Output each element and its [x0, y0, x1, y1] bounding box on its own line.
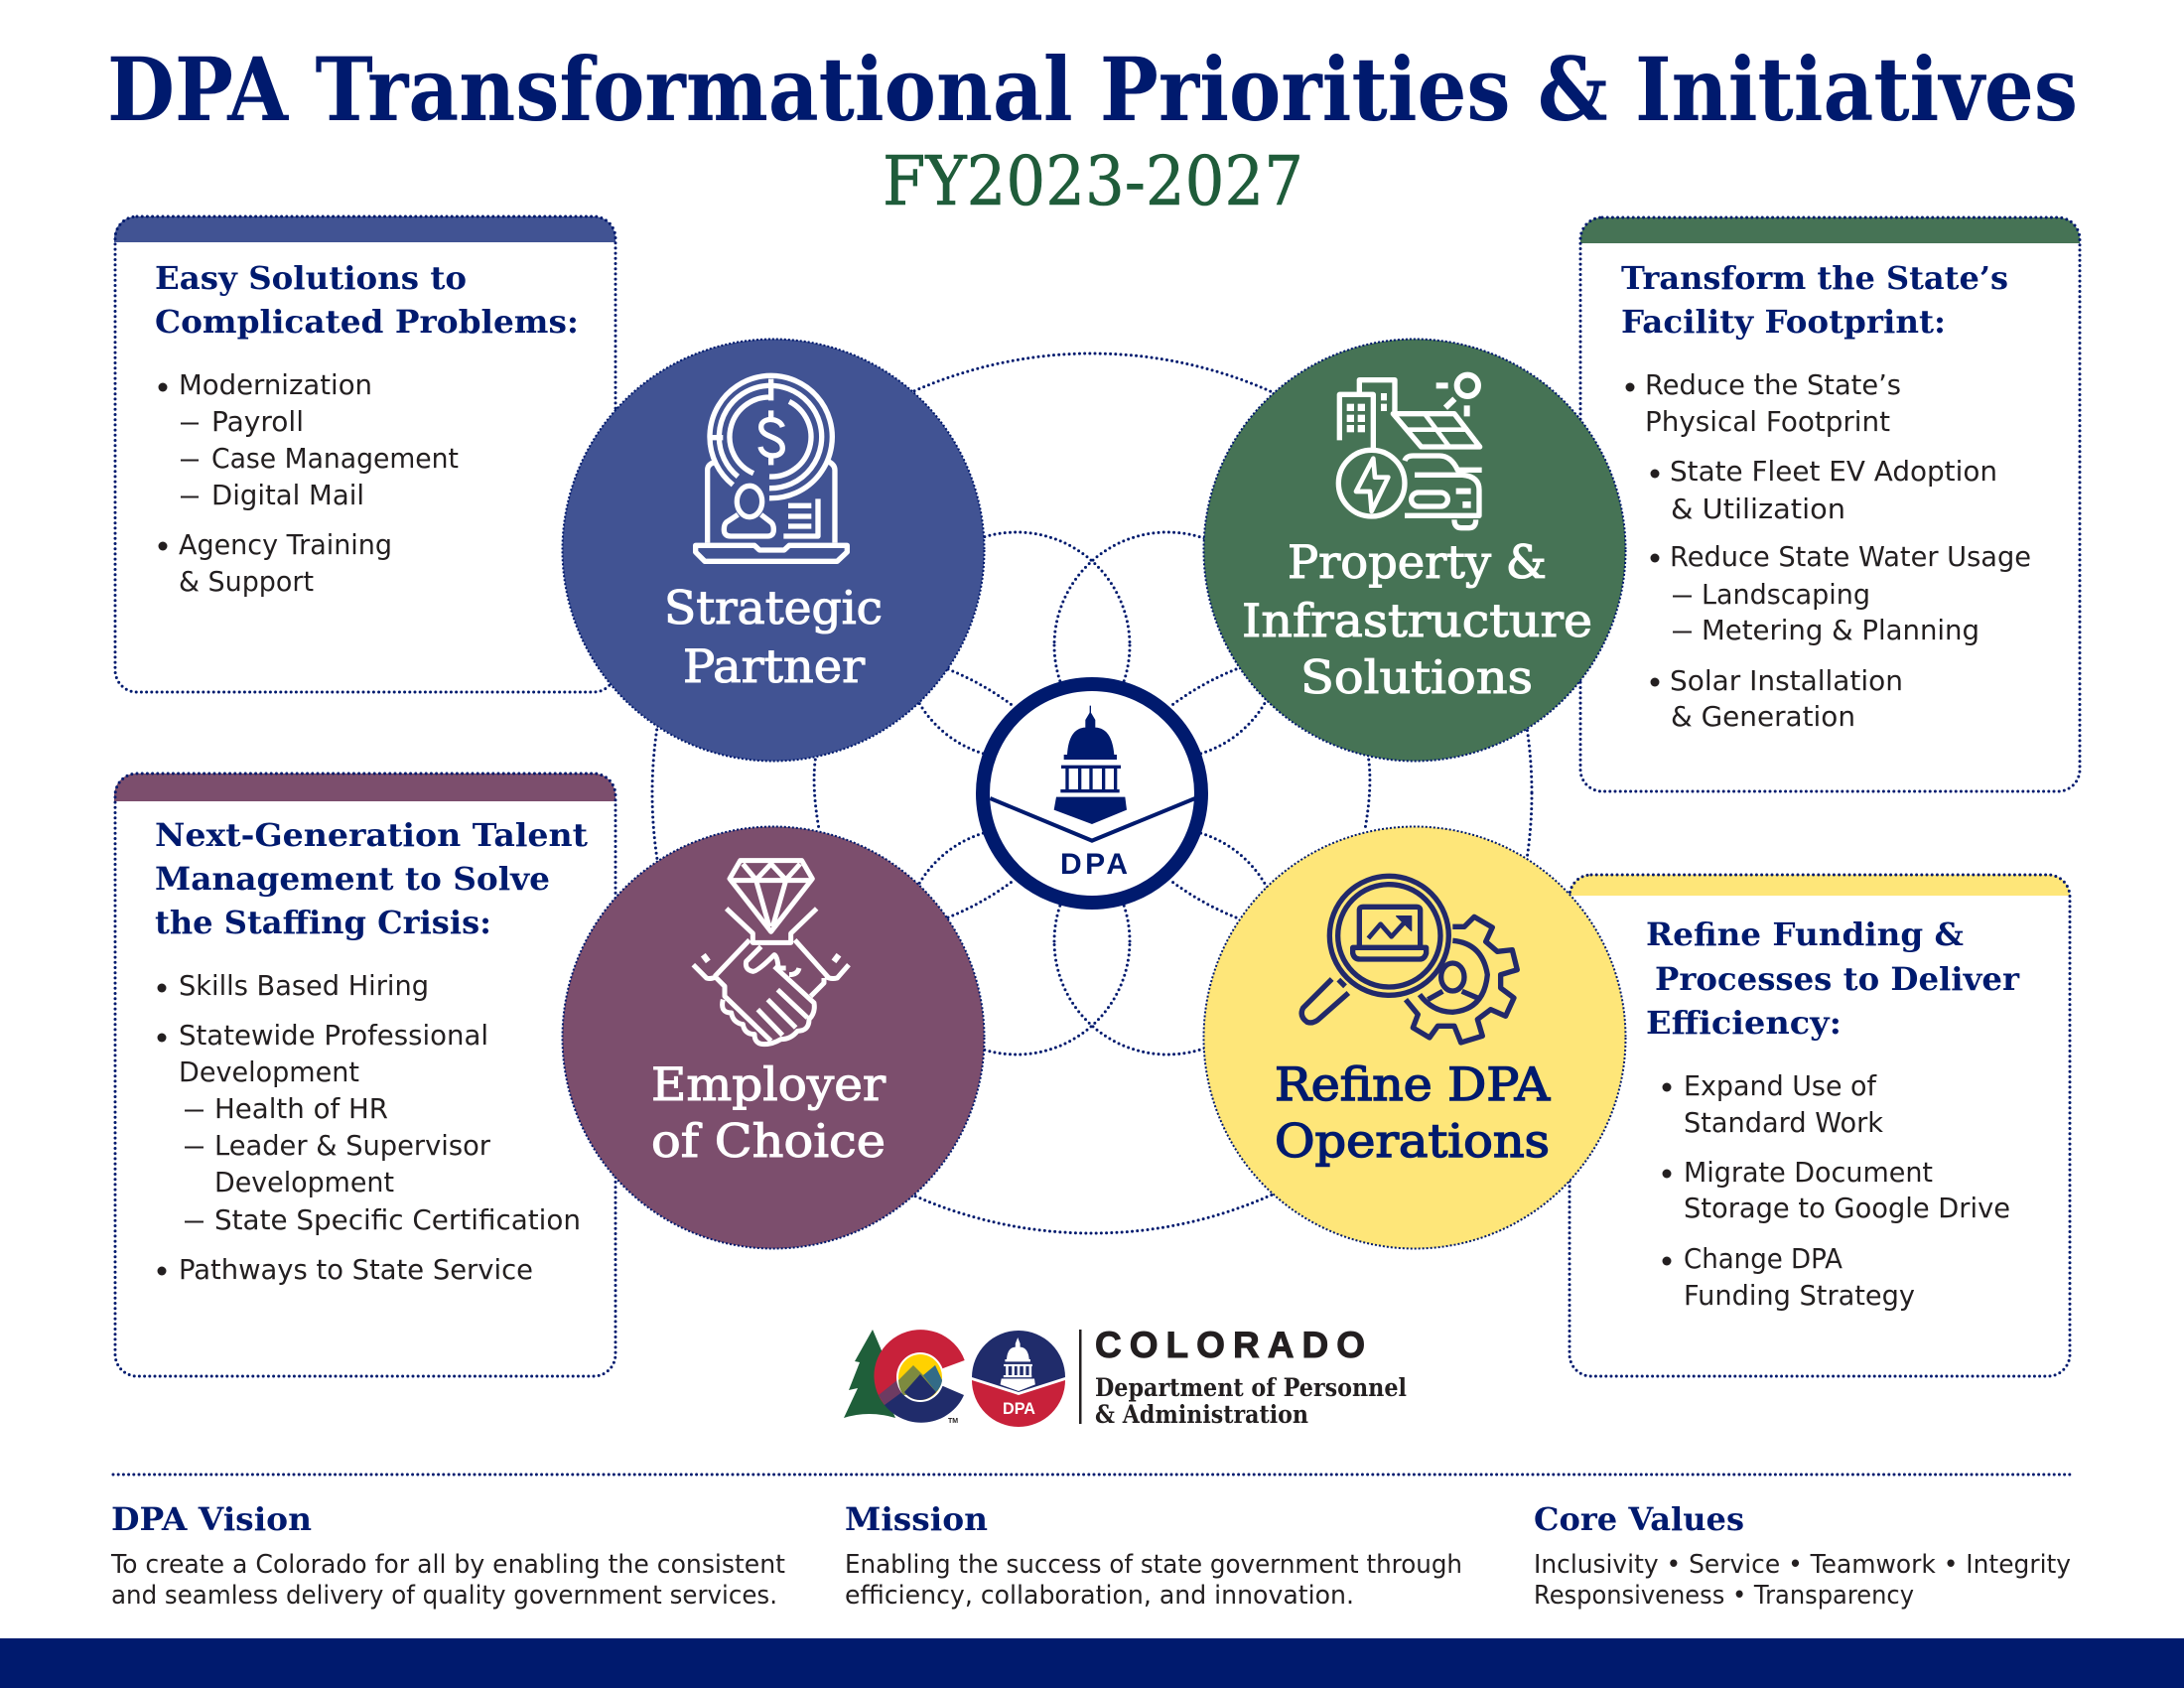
label: property and infrastructure solutions: Solutions: [1300, 650, 1533, 704]
logo text: & Administration: [1095, 1400, 1308, 1429]
bullet list: easy solutions: Agency Training: [179, 528, 392, 561]
panel band: green: [1580, 217, 2080, 243]
panel border: [115, 774, 615, 1376]
bullet list: easy solutions: Payroll: [211, 405, 304, 438]
bullet list: facility: —: [1672, 614, 1693, 646]
heading: facility footprint: [1621, 259, 2008, 341]
bottom bar: [0, 1638, 2184, 1688]
panel border: [1570, 875, 2070, 1376]
bullet list: refine funding: Funding Strategy: [1684, 1279, 1915, 1312]
icon: capitol building: [990, 706, 1195, 841]
icon: magnifier with laptop and gear: [1301, 876, 1517, 1043]
bullet list: refine funding: Change DPA: [1684, 1242, 1843, 1275]
bullet list: facility: Reduce the State’s: [1645, 368, 1901, 401]
panel: easy solutions: [114, 216, 615, 692]
footer: core values: Inclusivity • Service • Teamwork • Integrity: [1534, 1550, 2071, 1580]
icon: DPA emblem: [972, 1331, 1065, 1427]
bullet list: easy solutions: —: [180, 442, 200, 475]
bullet list: easy solutions: [159, 368, 459, 598]
footer: mission: efficiency, collaboration, and innovation.: [845, 1581, 1354, 1611]
bullet list: talent: —: [184, 1092, 205, 1125]
footer: core values: [1534, 1500, 2071, 1611]
icon: Colorado C: TM: [948, 1418, 958, 1425]
dotted flower pattern behind circles: [652, 353, 1532, 1233]
heading: easy solutions: [155, 259, 579, 341]
bullet list: facility: Reduce State Water Usage: [1670, 540, 2031, 573]
circle: refine DPA operations: [1203, 826, 1626, 1249]
bullet list: talent: Statewide Professional: [179, 1019, 488, 1052]
icon: DPA emblem: DPA: [1003, 1399, 1035, 1418]
bullet list: talent: —: [184, 1129, 205, 1162]
bullet list: easy solutions: Case Management: [211, 442, 459, 475]
bullet list: easy solutions: Modernization: [179, 368, 372, 401]
logo text: Department of Personnel: [1095, 1373, 1407, 1402]
label: property and infrastructure solutions: Property &: [1288, 535, 1547, 589]
footer: mission: Mission: [845, 1500, 988, 1538]
bullet list: facility: & Generation: [1671, 700, 1855, 733]
bullet list: talent: Skills Based Hiring: [179, 969, 429, 1002]
footer: DPA vision: DPA Vision: [111, 1500, 312, 1538]
bullet list: talent: Development: [179, 1055, 359, 1088]
panel: facility footprint: [1580, 217, 2080, 791]
bullet list: facility: —: [1672, 578, 1693, 611]
heading: easy solutions: Easy Solutions to: [155, 259, 467, 297]
label: employer of choice: Employer: [651, 1057, 886, 1111]
footer: DPA vision: To create a Colorado for all by enabling the consistent: [110, 1550, 785, 1580]
footer: mission: [845, 1500, 1462, 1611]
icon: Colorado C: [874, 1330, 965, 1425]
circle: employer of choice: [562, 826, 985, 1249]
heading: next-generation talent: [155, 816, 588, 941]
label: DPA: DPA: [1060, 848, 1128, 881]
bullet list: facility: Landscaping: [1702, 578, 1870, 611]
footer: DPA vision: and seamless delivery of quality government services.: [111, 1581, 777, 1611]
heading: refine funding: Processes to Deliver: [1655, 960, 2020, 998]
heading: refine funding: Efficiency:: [1646, 1004, 1842, 1042]
bullet list: easy solutions: —: [180, 479, 200, 511]
bullet list: facility: State Fleet EV Adoption: [1670, 455, 1997, 488]
heading: facility footprint: Transform the State’s: [1621, 259, 2008, 297]
circle: property and infrastructure solutions: [1203, 340, 1626, 761]
bullet list: facility: Metering & Planning: [1702, 614, 1979, 646]
icon: diamond and handshake: [693, 861, 849, 1045]
bullet list: easy solutions: Digital Mail: [211, 479, 364, 511]
footer: core values: Core Values: [1534, 1500, 1744, 1538]
logo: Colorado DPA: [844, 1325, 1407, 1429]
label: employer of choice: of Choice: [651, 1114, 886, 1168]
bullet list: easy solutions: & Support: [179, 565, 314, 598]
panel border: [1580, 217, 2080, 791]
logo text: COLORADO: [1095, 1325, 1365, 1365]
bullet list: refine funding: Expand Use of: [1684, 1069, 1877, 1102]
label: property and infrastructure solutions: [1242, 535, 1592, 704]
icon: laptop with coin and person: [696, 375, 847, 561]
panel band: blue: [114, 216, 615, 242]
panel: next-generation talent: [114, 774, 615, 1376]
center seal: DPA: [983, 684, 1201, 903]
bullet list: refine funding: Storage to Google Drive: [1684, 1192, 2010, 1224]
bullet list: facility: [1626, 368, 2031, 733]
panel: refine funding: [1570, 875, 2070, 1376]
label: employer of choice: [651, 1057, 886, 1168]
heading: refine funding: Refine Funding &: [1646, 915, 1964, 953]
label: strategic partner: [664, 581, 883, 693]
bullet list: talent: Health of HR: [214, 1092, 388, 1125]
label: refine DPA operations: Operations: [1275, 1114, 1550, 1168]
bullet list: talent: State Specific Certification: [214, 1203, 581, 1236]
bullet list: facility: & Utilization: [1671, 492, 1845, 525]
label: refine DPA operations: [1275, 1057, 1551, 1168]
bullet list: facility: Solar Installation: [1670, 664, 1903, 697]
panel band: yellow: [1570, 875, 2070, 896]
icon: tree: [844, 1330, 895, 1418]
footer: DPA vision: [110, 1500, 785, 1611]
footer: core values: Responsiveness • Transparency: [1534, 1581, 1914, 1611]
label: strategic partner: Strategic: [664, 581, 883, 634]
bullet list: talent: Pathways to State Service: [179, 1253, 533, 1286]
bullet list: talent: [157, 969, 581, 1286]
heading: next-generation talent: the Staffing Crisis:: [155, 904, 491, 941]
footer: mission: Enabling the success of state government through: [845, 1550, 1462, 1580]
subtitle: fiscal years: FY2023-2027: [883, 143, 1303, 221]
label: refine DPA operations: Refine DPA: [1275, 1057, 1551, 1111]
panel band: purple: [114, 774, 615, 801]
circle: strategic partner: [562, 340, 985, 761]
label: strategic partner: Partner: [683, 639, 865, 693]
heading: facility footprint: Facility Footprint:: [1621, 303, 1946, 341]
bullet list: easy solutions: —: [180, 405, 200, 438]
heading: next-generation talent: Next-Generation Talent: [155, 816, 588, 854]
heading: refine funding: [1646, 915, 2020, 1042]
bullet list: talent: —: [184, 1203, 205, 1236]
bullet list: talent: Development: [214, 1166, 394, 1198]
bullet list: refine funding: Migrate Document: [1684, 1156, 1933, 1189]
bullet list: talent: Leader & Supervisor: [214, 1129, 490, 1162]
bullet list: facility: Physical Footprint: [1645, 405, 1890, 438]
label: property and infrastructure solutions: Infrastructure: [1242, 594, 1592, 647]
heading: next-generation talent: Management to Solve: [155, 860, 550, 898]
panel border: [115, 216, 615, 692]
icon: buildings, solar panel, EV: [1338, 375, 1482, 528]
logo text: [1095, 1325, 1407, 1429]
bullet list: refine funding: [1662, 1069, 2010, 1312]
bullet list: refine funding: Standard Work: [1684, 1106, 1884, 1139]
heading: easy solutions: Complicated Problems:: [155, 303, 579, 341]
